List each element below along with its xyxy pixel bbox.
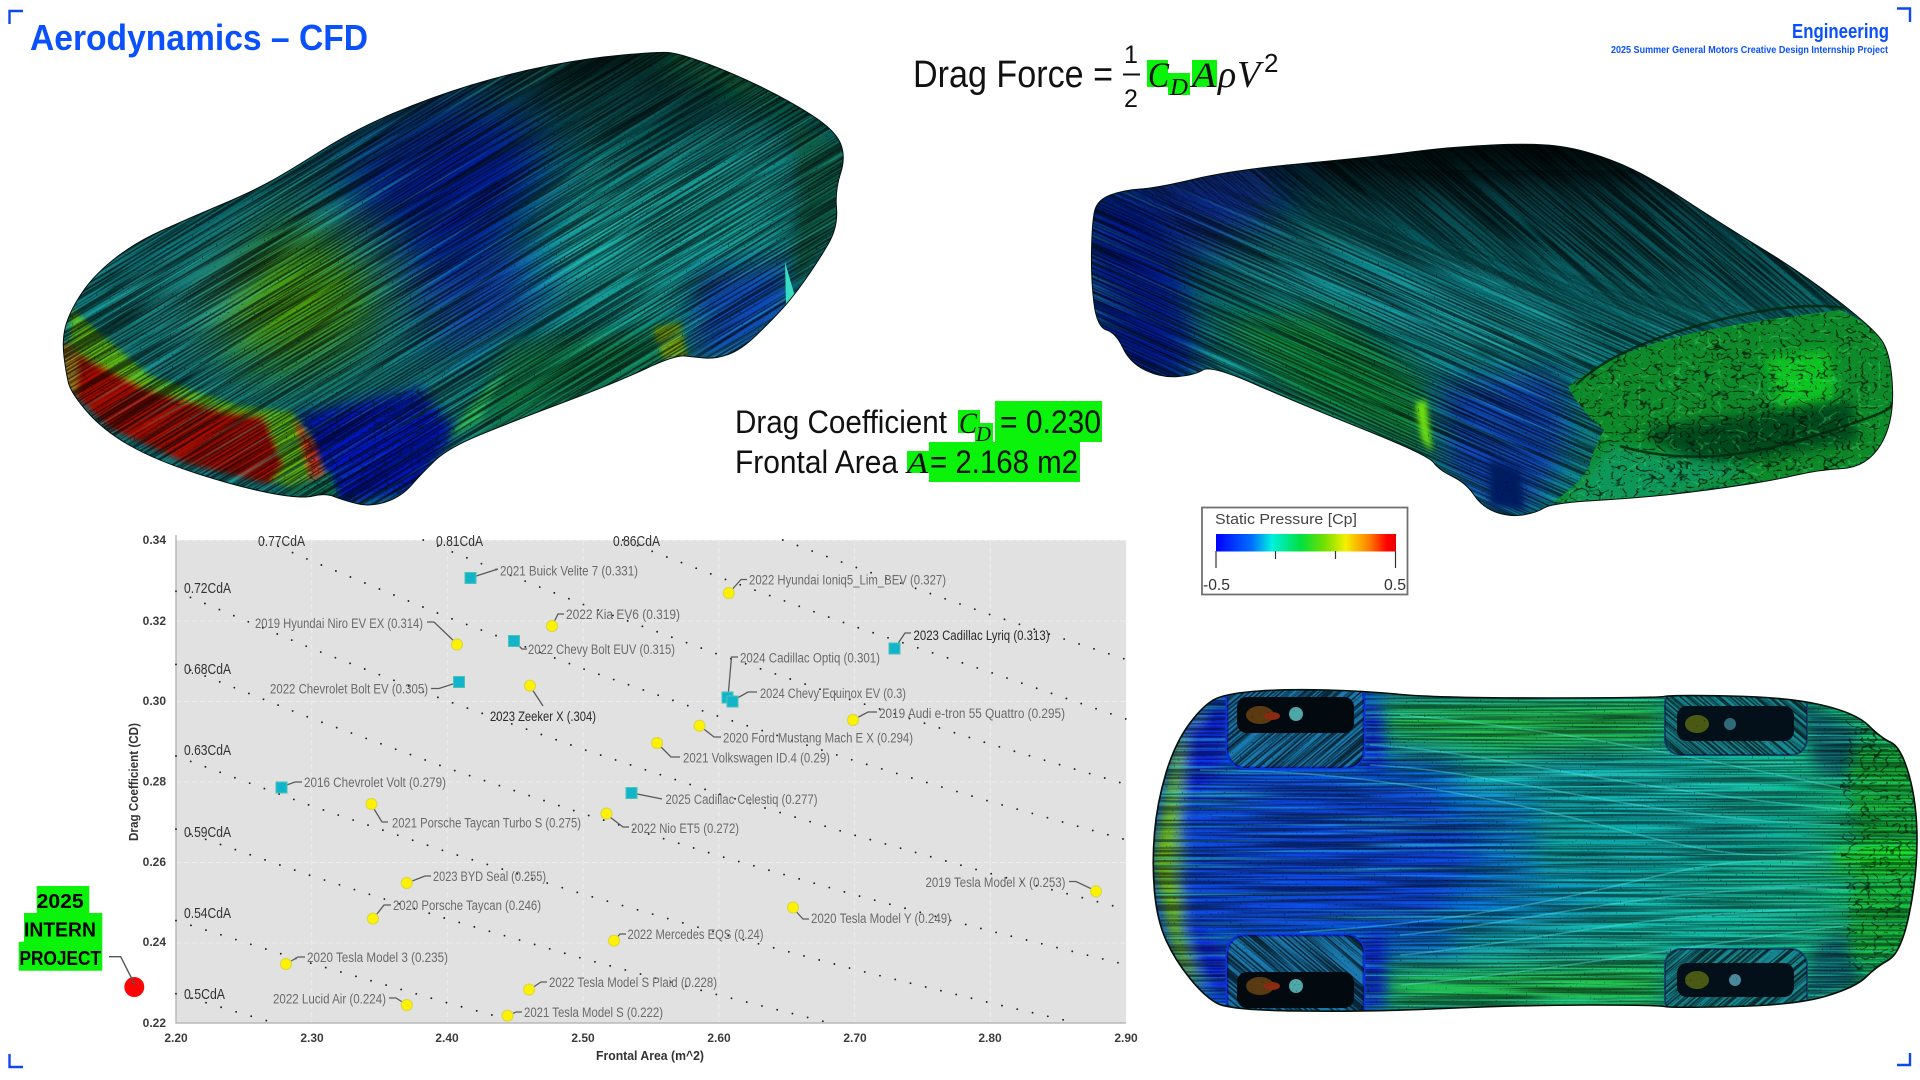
drag coefficient and frontal area values: = 0.230 [1000, 404, 1101, 440]
CdA labels: 0.81CdA [436, 533, 483, 550]
drag force equation: V [1237, 54, 1264, 96]
point: Nio ET5 [601, 808, 739, 836]
CdA labels: 0.63CdA [184, 742, 231, 759]
callout: 2025 intern project: PROJECT [20, 948, 101, 970]
point: Zeeker X: 2023 Zeeker X (.304) [490, 709, 596, 724]
point: Tesla Model X [926, 875, 1102, 897]
highlights [907, 401, 1102, 482]
point: Volkswagen ID.4 [652, 738, 830, 766]
drag force equation: Drag Force = [913, 54, 1113, 96]
x ticks: 2.80 [978, 1031, 1002, 1045]
point: Chevy Bolt EUV: 2022 Chevy Bolt EUV (0.315) [528, 642, 675, 657]
grid [176, 540, 1126, 1023]
y ticks: 0.34 [143, 533, 166, 547]
drag coefficient and frontal area values: D [975, 422, 991, 446]
point: Lucid Air: 2022 Lucid Air (0.224) [273, 992, 386, 1006]
point: Tesla Model 3 [280, 950, 448, 970]
CdA labels: 0.77CdA [258, 533, 305, 550]
car CFD: front three-quarter left view [55, 42, 855, 515]
header: engineering: Engineering [1792, 21, 1889, 43]
CdA labels: 0.86CdA [613, 533, 660, 550]
CdA labels: 0.72CdA [184, 580, 231, 597]
point: Tesla Model S [502, 1005, 663, 1021]
y ticks: 0.30 [143, 694, 166, 708]
car CFD: underside view [1150, 680, 1918, 1023]
title: Aerodynamics – CFD [30, 17, 368, 58]
callout: 2025 intern project: INTERN [24, 920, 96, 942]
point: Tesla Model Y: 2020 Tesla Model Y (0.249) [811, 911, 951, 926]
point: Tesla Model S Plaid: 2022 Tesla Model S Plaid (0.228) [549, 975, 717, 990]
drag force equation [913, 41, 1278, 113]
x ticks: 2.90 [1114, 1031, 1138, 1045]
point: Porsche Taycan: 2020 Porsche Taycan (0.246) [393, 898, 541, 913]
point: Porsche Taycan Turbo S [366, 798, 581, 830]
streamlines [55, 45, 855, 515]
constant CdA dotted curves [176, 540, 1126, 1023]
point: Chevy Equinox EV: 2024 Chevy Equinox EV (0.3) [760, 686, 906, 701]
wheel wells [1227, 680, 1807, 1023]
drag coefficient and frontal area values: Frontal Area [735, 444, 898, 480]
y ticks: 0.26 [143, 855, 166, 869]
point: Ford Mustang Mach E: 2020 Ford Mustang Mach E X (0.294) [723, 730, 913, 746]
drag force equation: 2 [1264, 48, 1278, 78]
front face [1552, 310, 1892, 503]
CdA labels: 0.54CdA [184, 905, 231, 922]
point: Audi e-tron [848, 706, 1065, 726]
point: BYD Seal [401, 869, 546, 888]
point: Cadillac Optiq [722, 650, 880, 703]
CdA labels: 0.59CdA [184, 824, 231, 841]
point: Chevrolet Bolt EV: 2022 Chevrolet Bolt EV (0.305) [270, 682, 428, 696]
header: engineering [1611, 21, 1889, 56]
y ticks: 0.24 [143, 935, 166, 949]
x ticks: 2.50 [571, 1031, 595, 1045]
point: Hyundai Ioniq5 [723, 572, 946, 598]
drag coefficient and frontal area values [735, 401, 1102, 482]
axis title: y: Drag Coefficient (CD) [126, 723, 141, 841]
chart: drag coefficient vs frontal area [126, 533, 1138, 1063]
axis title: x: Frontal Area (m^2) [596, 1048, 704, 1063]
point: Kia EV6 [546, 607, 680, 632]
point: BYD Seal: 2023 BYD Seal (0.255) [433, 869, 546, 884]
point: Tesla Model X: 2019 Tesla Model X (0.253) [926, 875, 1066, 890]
drag coefficient and frontal area values: A [905, 447, 929, 480]
x ticks: 2.30 [300, 1031, 324, 1045]
point: Hyundai Niro: 2019 Hyundai Niro EV EX (0.314) [255, 616, 423, 631]
streamlines [1098, 145, 1862, 334]
x ticks: 2.70 [843, 1031, 867, 1045]
y ticks: 0.28 [143, 774, 166, 788]
drag coefficient and frontal area values: = 2.168 m2 [930, 444, 1078, 480]
point: Cadillac Optiq: 2024 Cadillac Optiq (0.301) [740, 650, 880, 666]
point: Cadillac Celestiq: 2025 Cadillac Celestiq (0.277) [666, 792, 818, 807]
x ticks: 2.40 [435, 1031, 459, 1045]
point: Chevrolet Volt: 2016 Chevrolet Volt (0.279) [304, 775, 446, 790]
point: Buick Velite 7 [465, 564, 638, 584]
point: Mercedes EQS: 2022 Mercedes EQS (0.24) [628, 927, 764, 942]
car CFD: front three-quarter right view [1085, 130, 1900, 525]
point: Tesla Model S Plaid [524, 975, 717, 995]
y ticks: 0.22 [143, 1016, 166, 1030]
drag force equation: C [1148, 55, 1170, 95]
point: Cadillac Celestiq [626, 788, 818, 807]
point: Porsche Taycan [367, 898, 541, 924]
point: Tesla Model 3: 2020 Tesla Model 3 (0.235) [307, 950, 448, 965]
point: Chevy Equinox EV [727, 686, 906, 707]
point: Tesla Model Y [788, 902, 951, 926]
drag coefficient and frontal area values: Drag Coefficient [735, 404, 947, 440]
point: Nio ET5: 2022 Nio ET5 (0.272) [631, 821, 739, 836]
point: Tesla Model S: 2021 Tesla Model S (0.222) [524, 1005, 663, 1020]
plot area [176, 540, 1126, 1023]
point: Volkswagen ID.4: 2021 Volkswagen ID.4 (0.29) [683, 750, 830, 766]
point: Porsche Taycan Turbo S: 2021 Porsche Taycan Turbo S (0.275) [392, 816, 581, 830]
streamlines [1150, 685, 1918, 1015]
CdA labels [184, 533, 660, 1003]
drag force equation: ρ [1217, 54, 1236, 96]
point: Chevrolet Volt [276, 775, 446, 793]
x ticks: 2.20 [164, 1031, 188, 1045]
point: Cadillac Lyriq: 2023 Cadillac Lyriq (0.313) [914, 628, 1050, 643]
point: Kia EV6: 2022 Kia EV6 (0.319) [566, 607, 680, 622]
CdA labels: 0.5CdA [184, 986, 225, 1003]
rear vortex flow [1840, 715, 1917, 975]
header: engineering: 2025 Summer General Motors Creative Design Internship Project [1611, 45, 1889, 56]
point: Cadillac Lyriq [889, 628, 1050, 654]
point: Audi e-tron: 2019 Audi e-tron 55 Quattro (0.295) [879, 706, 1065, 721]
CdA labels: 0.68CdA [184, 661, 231, 678]
point: Mercedes EQS [608, 927, 764, 946]
point: Hyundai Ioniq5: 2022 Hyundai Ioniq5_Lim_BEV (0.327) [749, 572, 946, 588]
legend: static pressure: Static Pressure [Cp] [1215, 511, 1357, 528]
legend: static pressure [1202, 508, 1408, 594]
y ticks: 0.32 [143, 614, 166, 628]
y ticks [143, 533, 166, 1030]
drag force equation: D [1169, 75, 1188, 101]
legend: static pressure: -0.5 [1203, 577, 1230, 594]
drag force equation: A [1190, 55, 1217, 95]
highlight: CD and A [1147, 60, 1217, 95]
point: Zeeker X [490, 680, 596, 724]
point: Hyundai Niro [255, 616, 462, 650]
point: Ford Mustang Mach E [694, 720, 913, 746]
drag force equation: 1 [1124, 41, 1138, 69]
drag coefficient and frontal area values: C [959, 407, 978, 440]
drag force equation: 2 [1124, 85, 1138, 113]
point: Chevy Bolt EUV [508, 636, 675, 657]
red marker [124, 977, 144, 997]
x ticks: 2.60 [707, 1031, 731, 1045]
callout: 2025 intern project: 2025 [37, 891, 84, 913]
x ticks [164, 1031, 1138, 1045]
callout: 2025 intern project [19, 886, 144, 997]
point: Buick Velite 7: 2021 Buick Velite 7 (0.331) [500, 564, 638, 578]
legend: static pressure: 0.5 [1384, 577, 1406, 594]
